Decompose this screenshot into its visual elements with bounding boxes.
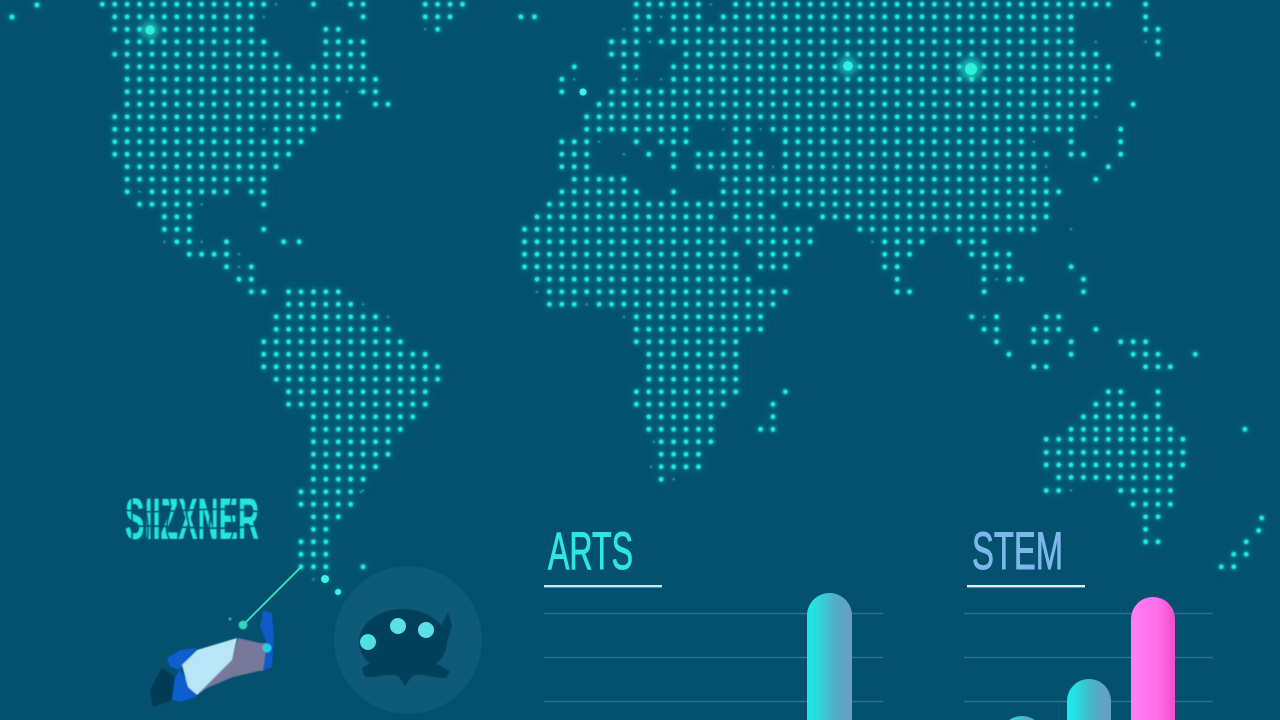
highlighted map nodes [141,21,982,595]
heading: stem: STEM [972,522,1063,581]
stem bar small [1000,716,1044,720]
panel: arts chart [544,522,883,720]
panel: stem chart [964,522,1213,720]
map dots: faint dots [115,4,1146,579]
stem underline [967,585,1085,587]
illustration: fragmented figure [150,610,274,707]
heading: arts: ARTS [548,522,633,581]
garbled heading [125,498,259,540]
garbled heading: SIIZXNER [125,487,259,552]
illustration: circle badge with dark creature [334,566,482,714]
map dots: main land dots [102,4,1262,592]
stem bar tall [1131,597,1175,720]
connector line [243,567,301,625]
arts underline [544,585,662,587]
arts bar [807,593,852,720]
isolated offshore dots [10,3,39,19]
stem bar medium [1067,679,1111,720]
